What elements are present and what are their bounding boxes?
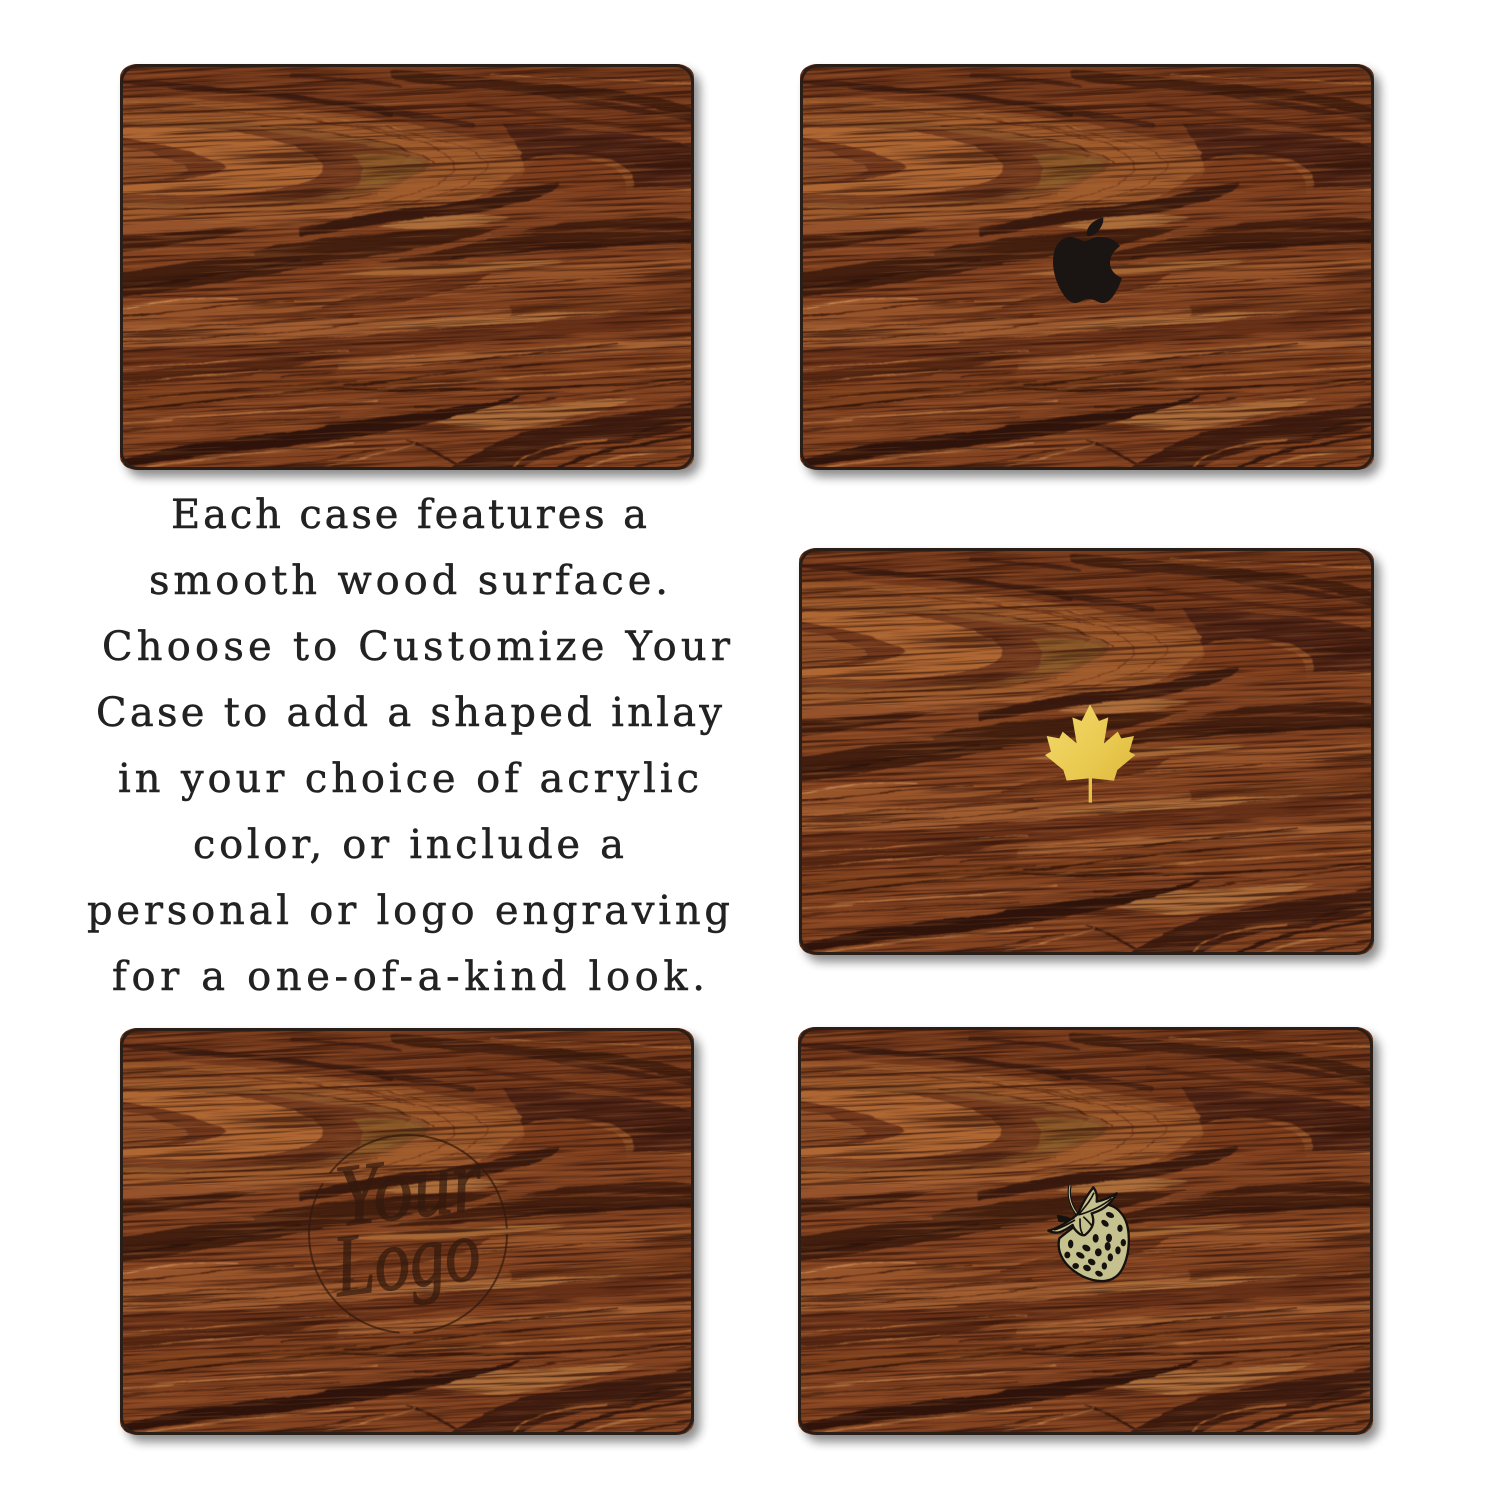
panel: case with strawberry inlay (734, 969, 1453, 1500)
engraving: circular your logo mark: Logo (327, 1202, 485, 1316)
text block: description: for a one-of-a-kind look. (112, 954, 705, 1000)
text block: description (87, 492, 731, 1000)
text block: description: Each case features a (171, 492, 647, 538)
text block: description: in your choice of acrylic (118, 756, 699, 802)
panel: plain wood case (56, 7, 774, 537)
engraving: circular your logo mark (309, 1132, 507, 1333)
panel: case with engraved logo (56, 971, 774, 1500)
text block: description: personal or logo engraving (87, 888, 730, 934)
icon: maple leaf inlay (1045, 704, 1135, 803)
text block: description: color, or include a (193, 822, 624, 868)
text block: description: Choose to Customize Your (102, 624, 731, 670)
engraving: circular your logo mark: Your (331, 1132, 488, 1246)
panel: case with black apple inlay (736, 7, 1454, 537)
icon: apple inlay (1053, 218, 1122, 303)
icon: strawberry inlay (1048, 1185, 1129, 1281)
text block: description: smooth wood surface. (149, 558, 668, 604)
text block: description: Case to add a shaped inlay (96, 690, 722, 736)
panel: case with gold maple leaf inlay (735, 491, 1454, 1022)
